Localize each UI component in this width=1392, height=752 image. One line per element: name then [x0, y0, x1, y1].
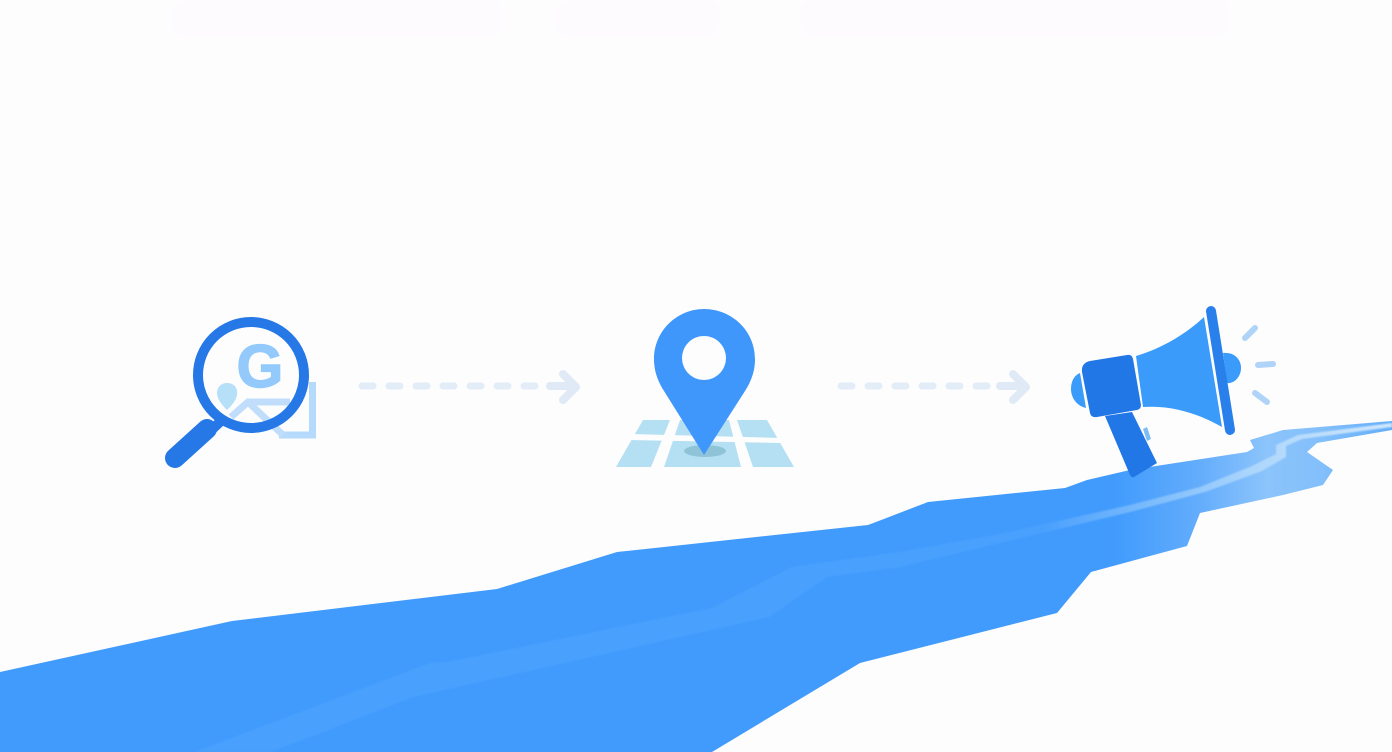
river path: [0, 421, 1392, 752]
rear bump: [1071, 373, 1086, 408]
map blob: [217, 383, 237, 410]
river highlight stream: [195, 423, 1392, 752]
image frame behind lens: [279, 382, 312, 435]
mountain outline: [231, 402, 290, 435]
arrow: pin to megaphone: [841, 374, 1026, 400]
icon: location pin on map: [616, 309, 794, 467]
pin: [654, 309, 755, 455]
small trigger: [1143, 427, 1151, 441]
sound waves: [1245, 328, 1273, 402]
pin shadow: [684, 445, 726, 457]
handle: [1105, 412, 1157, 477]
neck: [205, 421, 221, 436]
letter G: G: [237, 333, 283, 400]
icon: magnifier with Google G and image: [175, 322, 312, 458]
map tile: [616, 420, 794, 467]
faded heading remnant: [172, 0, 1230, 36]
cone: [1136, 317, 1222, 427]
rim: [1211, 311, 1230, 430]
map roads: [628, 420, 782, 467]
icon: megaphone: [1071, 311, 1273, 477]
body: [1082, 355, 1141, 417]
front bump: [1223, 353, 1241, 383]
lens ring: [198, 322, 304, 428]
handle: [175, 429, 207, 458]
arrow: search to pin: [362, 374, 576, 400]
pin hole: [682, 336, 726, 380]
